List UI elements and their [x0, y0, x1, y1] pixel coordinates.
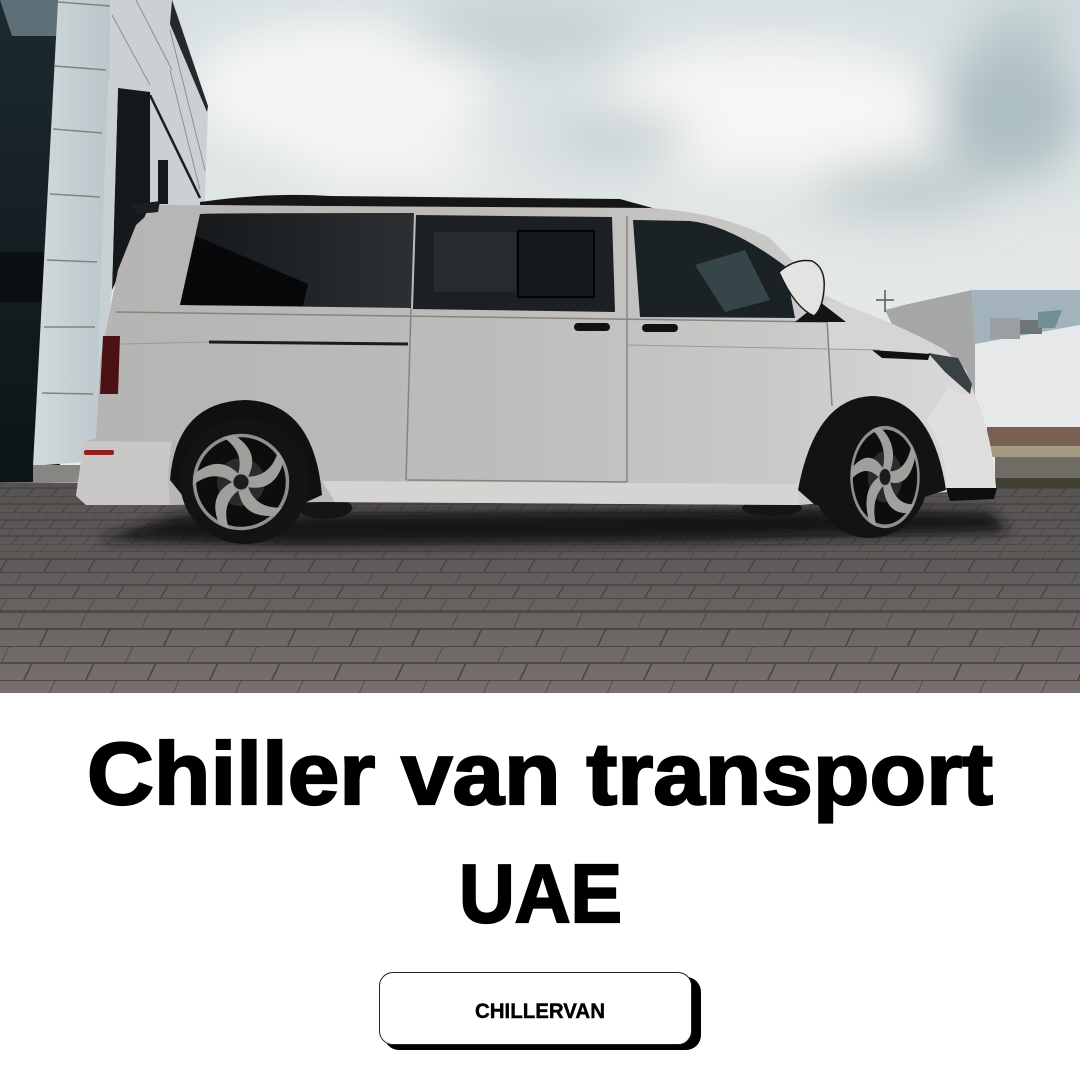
- cab window: [633, 220, 795, 318]
- side mirror: [795, 302, 846, 322]
- rear wheel: [180, 418, 310, 544]
- button face: [379, 972, 692, 1045]
- rear window: [180, 213, 414, 308]
- van: [76, 195, 997, 544]
- sky with clouds: [0, 0, 1080, 500]
- tail light: [100, 336, 120, 394]
- wheel arches: [170, 400, 322, 505]
- button label: CHILLERVAN: [475, 1000, 605, 1023]
- rear bumper: [76, 441, 172, 505]
- lower sill: [322, 481, 800, 505]
- front wheel: [812, 418, 928, 538]
- door seams: [116, 216, 832, 482]
- brick pavement: [0, 482, 1080, 693]
- van body: [76, 205, 996, 505]
- middle window: [413, 215, 615, 312]
- rear spoiler: [131, 201, 160, 214]
- title line 2: UAE: [459, 847, 622, 940]
- front bumper: [926, 388, 996, 490]
- title line 1: Chiller van transport: [87, 724, 993, 823]
- title: [87, 724, 993, 940]
- far side tyres: [298, 497, 352, 519]
- headlight: [928, 353, 972, 394]
- building at left: [0, 0, 208, 482]
- hood highlight: [826, 300, 945, 354]
- photo: silver van parked in front of a building: [0, 0, 1080, 693]
- door handles: [574, 323, 610, 331]
- building at right: [876, 290, 1080, 488]
- button shadow: [384, 977, 701, 1050]
- van roof rail: [200, 195, 656, 209]
- button: CHILLERVAN: [379, 972, 701, 1050]
